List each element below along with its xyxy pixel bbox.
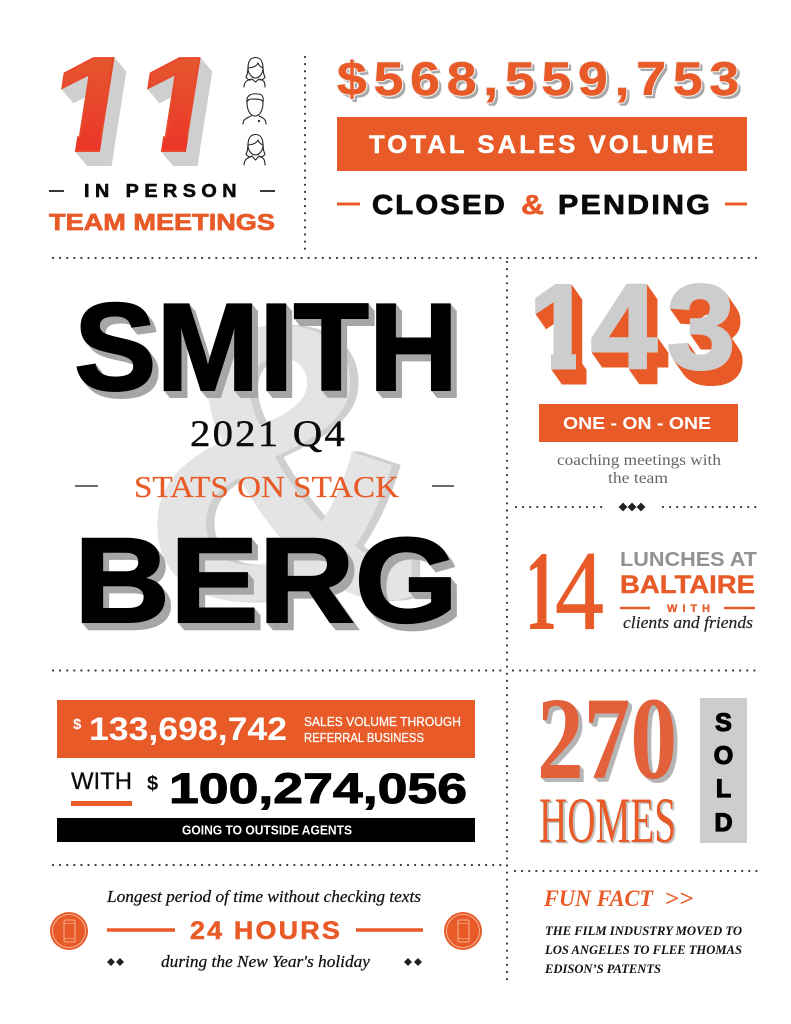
stat: 24 hours: 24 HOURS	[190, 917, 342, 945]
heading: fun fact: FUN FACT	[543, 886, 654, 911]
banner: one on one: ONE - ON - ONE	[563, 413, 711, 433]
banner: going to outside agents	[57, 818, 475, 842]
panel: sold vertical tag: S	[715, 709, 732, 737]
stat: 11 numerals	[61, 57, 212, 166]
banner: referral sales volume: 133,698,742	[89, 711, 287, 747]
title: Smith: SMITH	[74, 279, 458, 417]
icon: phone left	[50, 912, 88, 950]
label: closed and pending	[337, 189, 747, 220]
stat: outside agents amount: $	[147, 773, 158, 795]
stat: total sales amount: $568,559,753	[337, 52, 746, 105]
icon: woman	[244, 58, 265, 87]
banner: total sales volume: TOTAL SALES VOLUME	[369, 131, 717, 159]
caption: coaching meetings: coaching meetings with	[557, 452, 721, 469]
text: fun fact body: LOS ANGELES TO FLEE THOMAS	[544, 943, 742, 957]
text: fun fact body: THE FILM INDUSTRY MOVED TO	[545, 924, 742, 938]
label: lunches at baltaire	[620, 549, 757, 632]
banner: total sales volume	[337, 117, 747, 171]
text: during the new year's holiday: during the New Year's holiday	[161, 952, 371, 971]
icon: woman with wavy hair	[244, 134, 265, 165]
panel: sold vertical tag	[700, 698, 747, 843]
label: with underline: WITH	[71, 768, 132, 795]
label: in person: IN PERSON	[84, 181, 242, 201]
banner: going to outside agents: GOING TO OUTSIDE AGENTS	[182, 822, 352, 838]
stat: 143 numerals: 3	[667, 260, 735, 394]
banner: referral sales volume: SALES VOLUME THROUGH	[304, 714, 461, 729]
stat: 143 numerals	[535, 283, 743, 386]
ornament: three diamonds	[619, 503, 645, 511]
label: closed and pending: &	[521, 189, 544, 220]
ornament: right diamonds	[404, 958, 422, 966]
panel: sold vertical tag: O	[714, 742, 733, 770]
caption: coaching meetings	[557, 452, 721, 487]
ornament: left diamonds	[107, 958, 124, 966]
stat: 143 numerals: 4	[591, 260, 657, 394]
title: Berg: BERG	[74, 512, 458, 648]
text: fun fact body: EDISON’S PATENTS	[544, 962, 661, 976]
icon: phone right	[444, 912, 482, 950]
stat: 143 numerals: 1	[529, 260, 591, 394]
label: closed and pending: CLOSED	[372, 189, 507, 220]
stat: 270 homes: HOMES	[539, 785, 676, 857]
panel: sold vertical tag: L	[716, 775, 731, 803]
label: lunches at baltaire: WITH	[667, 603, 710, 615]
banner: referral sales volume: $	[73, 716, 82, 733]
stat: 270 homes: 270	[537, 673, 677, 804]
stat: outside agents amount: 100,274,056	[169, 765, 467, 813]
stat: 11 numerals: 1	[37, 29, 146, 180]
stat: 14 numerals: 1	[525, 529, 557, 654]
label: lunches at baltaire: LUNCHES AT	[620, 549, 757, 571]
subtitle: 2021 Q4: 2021 Q4	[190, 414, 347, 455]
stat: 11 numerals: 1	[123, 29, 232, 180]
label: lunches at baltaire: BALTAIRE	[620, 571, 755, 599]
banner: one on one	[539, 404, 738, 442]
banner: referral sales volume: REFERRAL BUSINESS	[304, 730, 424, 745]
label: closed and pending: PENDING	[558, 189, 712, 220]
caption: coaching meetings: the team	[608, 470, 668, 487]
background ampersand: &	[140, 242, 424, 682]
label: team meetings: TEAM MEETINGS	[49, 209, 275, 235]
stat: 270 homes	[537, 673, 681, 858]
heading: fun fact: >>	[665, 886, 694, 911]
stat: 14 numerals: 4	[555, 529, 604, 654]
text: fun fact body	[544, 924, 742, 976]
label: lunches at baltaire: clients and friends	[623, 613, 753, 632]
icon: man	[243, 94, 266, 124]
subtitle: stats on stack: STATS ON STACK	[134, 469, 400, 504]
text: longest period: Longest period of time without checking texts	[106, 887, 421, 906]
banner: referral sales volume	[57, 700, 475, 758]
panel: sold vertical tag: D	[714, 809, 733, 837]
